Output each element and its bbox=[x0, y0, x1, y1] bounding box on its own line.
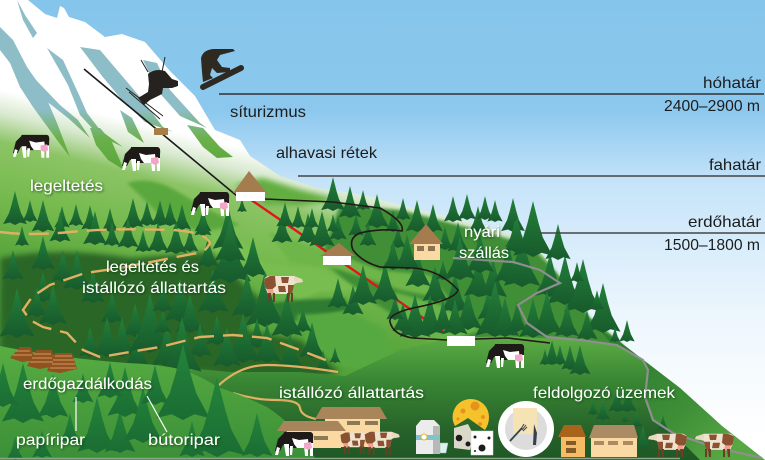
orange lower path 1 bbox=[218, 365, 338, 386]
orange forest path bbox=[0, 229, 333, 363]
upper lift station bbox=[233, 171, 267, 201]
black lift road bbox=[265, 199, 550, 343]
brown cow on meadow bbox=[264, 276, 303, 302]
label: stabling: istállózó állattartás bbox=[279, 385, 424, 402]
barn complex with dairy cow bbox=[275, 407, 400, 456]
label: grazing and stabling line 2: istállózó állattartás bbox=[82, 280, 226, 297]
right outer slope bbox=[600, 330, 765, 460]
label: forest line altitude: 1500–1800 m bbox=[664, 237, 760, 254]
cow 2 bbox=[122, 147, 160, 171]
cow 4 bbox=[486, 344, 524, 368]
grey road bbox=[453, 258, 762, 458]
label: tree line: fahatár bbox=[709, 157, 762, 174]
labels bbox=[16, 75, 762, 449]
bottom ground line bbox=[0, 458, 680, 460]
label: paper industry: papíripar bbox=[16, 432, 86, 449]
label: processing plants: feldolgozó üzemek bbox=[533, 385, 676, 402]
cows bbox=[13, 135, 524, 368]
background forest trees bbox=[0, 177, 668, 450]
label: grazing: legeltetés bbox=[30, 178, 103, 195]
label: subalpine meadows: alhavasi rétek bbox=[276, 145, 378, 162]
ski lift cable upper bbox=[84, 69, 237, 196]
tree line bbox=[298, 175, 765, 177]
snow rock shadows bbox=[0, 0, 233, 170]
snow line bbox=[219, 93, 764, 95]
label: forestry: erdőgazdálkodás bbox=[23, 376, 152, 393]
label: summer shelter line 2: szállás bbox=[459, 245, 509, 262]
icon: cheese wheel bbox=[453, 399, 489, 430]
bottom left hill bbox=[0, 346, 315, 458]
label: forest line: erdőhatár bbox=[688, 214, 762, 231]
lift pylon box bbox=[154, 128, 168, 135]
small factory bbox=[558, 425, 586, 457]
lighter clearings bbox=[210, 232, 400, 370]
label: snow line altitude: 2400–2900 m bbox=[664, 98, 760, 115]
orange lower path 2 bbox=[233, 393, 316, 419]
ski lift red cable bbox=[247, 197, 445, 333]
label: ski tourism: síturizmus bbox=[230, 104, 306, 121]
label: snow line: hóhatár bbox=[703, 75, 762, 92]
lower right hill bbox=[185, 336, 700, 460]
foreground trees bbox=[0, 344, 272, 460]
cow 3 bbox=[191, 192, 229, 216]
connector: paper industry bbox=[75, 397, 77, 431]
middle lift station bbox=[320, 243, 355, 265]
cow 1 bbox=[13, 135, 49, 158]
forest line bbox=[540, 232, 765, 234]
label: furniture industry: bútoripar bbox=[148, 432, 221, 449]
icon: skier silhouette bbox=[126, 57, 178, 119]
lower lift station bbox=[447, 336, 475, 346]
large factory bbox=[589, 425, 638, 457]
dark forest band bbox=[0, 252, 340, 385]
icon: plate with fork and knife bbox=[498, 401, 554, 457]
icon: blue cheese blocks bbox=[454, 424, 493, 455]
gravel roads bbox=[0, 199, 762, 458]
brown cows at factory bbox=[648, 434, 734, 457]
connector: furniture industry bbox=[147, 396, 167, 432]
label: summer shelter line 1: nyári bbox=[464, 224, 500, 241]
icon: log piles bbox=[10, 347, 77, 373]
icon: milk carton bbox=[416, 420, 448, 454]
green meadow patches bbox=[127, 181, 240, 232]
summer shelter hut bbox=[409, 224, 443, 260]
label: grazing and stabling: legeltetés és bbox=[106, 259, 199, 276]
icon: snowboarder silhouette bbox=[201, 49, 241, 87]
